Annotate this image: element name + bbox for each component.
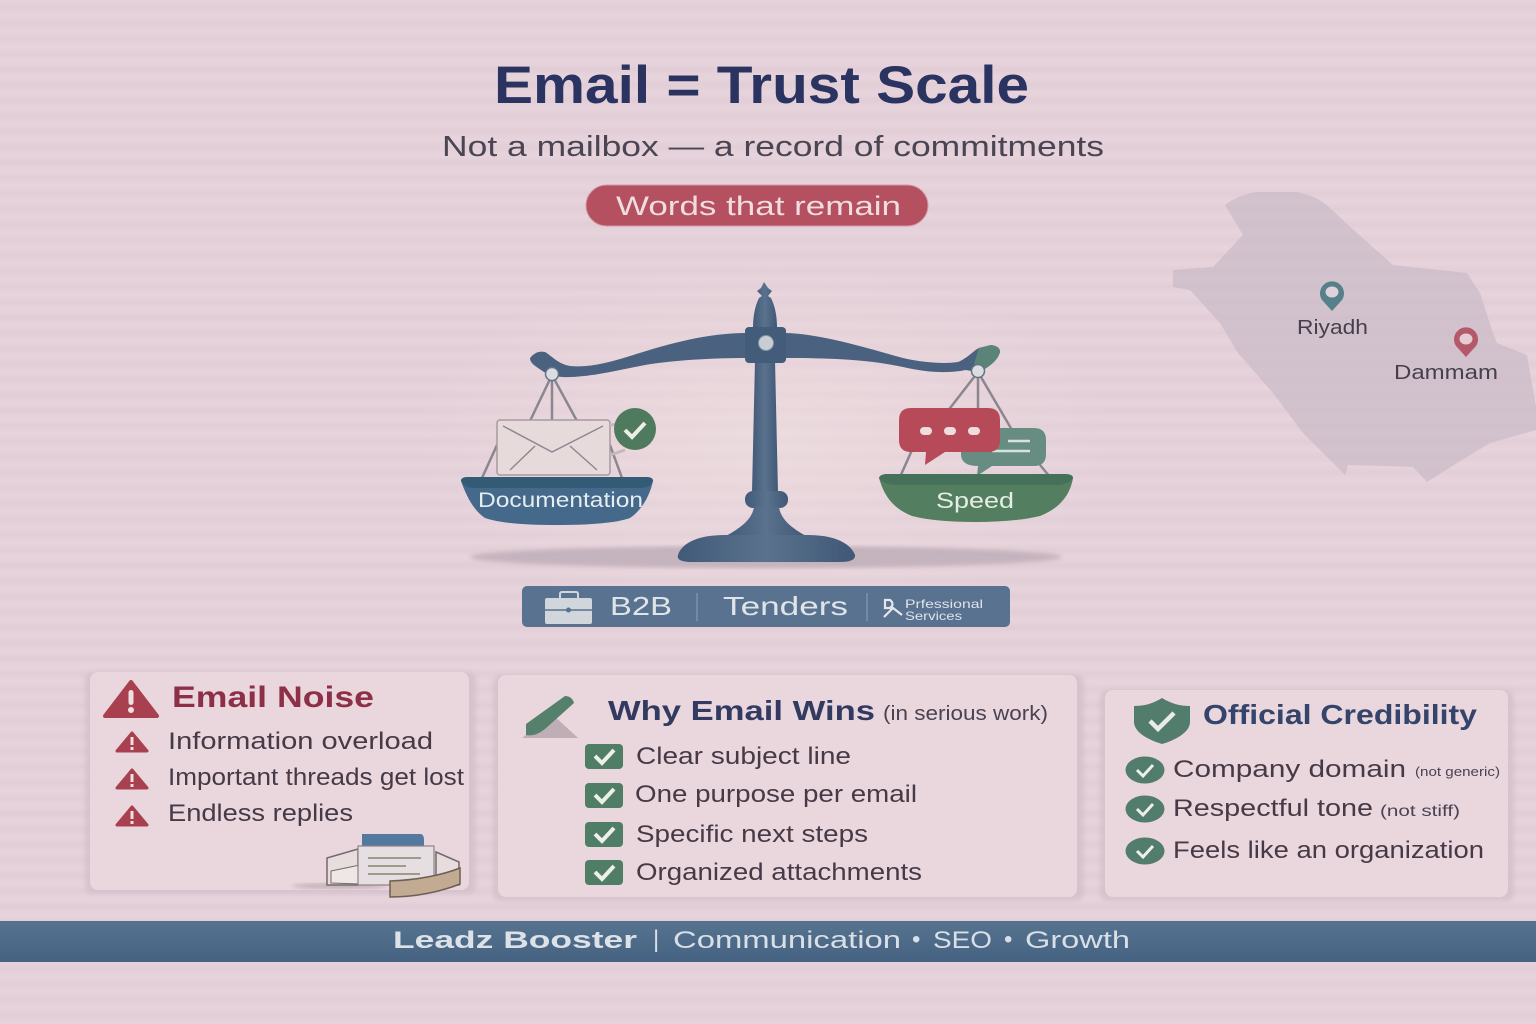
icon: pile of mail [292,834,460,897]
icon: professional services [884,600,902,617]
list item: respectful tone: (not stiff) [1380,803,1460,820]
icon: shield [1134,698,1190,744]
label: Dammam: Dammam [1394,362,1498,384]
pan: documentation: Documentation [478,489,643,512]
right hanger cords [900,372,1050,477]
sector strip [522,586,1010,627]
heading note: (in serious work) [883,703,1048,725]
footer tagline: | [653,926,659,953]
list item: feels like an organization: Feels like an organization [1173,837,1484,864]
footer bar [0,921,1536,962]
label: professional services: Services [905,609,962,623]
footer brand: Leadz Booster [393,927,637,954]
heading: official credibility: Official Credibility [1203,699,1477,730]
footer tagline: Communication [673,927,901,954]
checklist item: clear subject line: Clear subject line [636,743,851,770]
scale stand [678,282,855,562]
icon: large warning triangle [105,682,157,716]
pan: documentation [461,477,653,525]
footer tagline: • [912,926,920,953]
panel: official credibility [1100,690,1514,901]
checklist item: one purpose: One purpose per email [635,781,917,808]
badge: words that remain: Words that remain [616,191,901,221]
checklist item: attachments: Organized attachments [636,859,922,886]
label: Tenders: Tenders [723,591,848,621]
list item: endless replies [117,800,353,827]
map pin: Riyadh [1320,281,1344,311]
footer tagline: Growth [1025,927,1130,954]
icon: red speech bubble [899,408,1000,465]
heading: why email wins: Why Email Wins [608,695,875,726]
left hanger cords [482,375,622,478]
label: professional services: Prfessional [905,597,983,611]
list item: respectful tone: Respectful tone [1173,795,1373,822]
list item: endless replies: Endless replies [168,800,353,827]
footer tagline: SEO [933,927,992,954]
icon: briefcase [545,592,592,624]
panel: why email wins [493,675,1084,901]
icon: green check badge [610,408,656,455]
scale beam [530,333,746,377]
balance scale illustration [461,282,1073,568]
scale hub [745,327,786,363]
list item: company domain [1126,756,1500,784]
footer tagline: • [1004,926,1012,953]
pan: speed [879,474,1073,522]
map: Saudi Arabia [1173,192,1536,482]
icon: envelope [497,420,610,475]
title: Email = Trust Scale [494,56,1029,115]
subtitle: Not a mailbox — a record of commitments [442,131,1104,163]
checklist item: clear subject line [585,743,851,770]
panel: email noise [85,672,476,897]
pivot pins [546,364,984,380]
list item: company domain: Company domain [1173,756,1406,783]
list item: information overload [117,728,433,755]
list item: company domain: (not generic) [1415,764,1500,779]
list item: important threads: Important threads get lost [168,764,464,791]
badge: words that remain [586,185,928,226]
footer tagline [653,926,1130,954]
icon: green pen [522,696,578,738]
list item: information overload: Information overload [168,728,433,755]
icon: green speech bubble [961,428,1046,476]
list item: respectful tone [1126,795,1460,822]
map pin: Dammam [1454,327,1478,357]
label: B2B: B2B [610,591,672,621]
label: professional services [905,597,983,623]
heading: email noise: Email Noise [172,681,374,714]
pan: speed: Speed [936,488,1014,513]
checklist item: next steps: Specific next steps [636,821,868,848]
label: Riyadh: Riyadh [1297,317,1368,339]
